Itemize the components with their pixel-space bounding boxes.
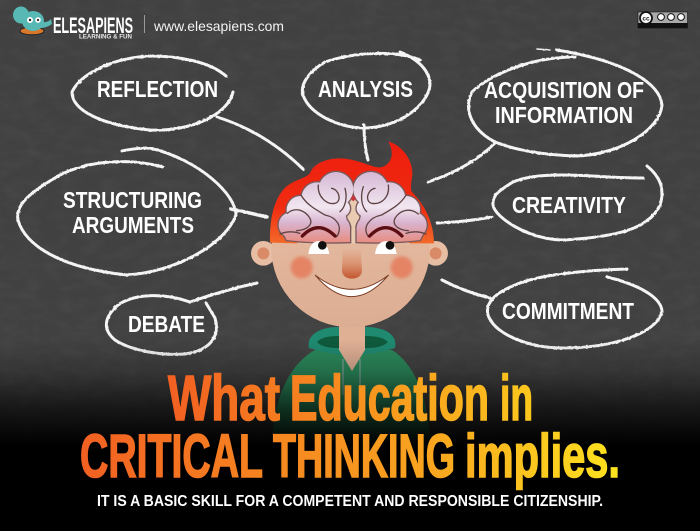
bubble: reflection bbox=[72, 56, 303, 169]
hoodie body bbox=[272, 350, 430, 440]
bubble: acquisition of information bbox=[428, 49, 662, 182]
bubble: creativity bbox=[437, 166, 662, 240]
ears bbox=[251, 241, 448, 266]
logo wordmark: ELESAPIENS bbox=[53, 13, 133, 38]
head bbox=[271, 169, 430, 327]
brain outline bbox=[279, 172, 427, 242]
brain bbox=[279, 172, 427, 242]
bubble labels bbox=[63, 76, 644, 337]
icon: Creative Commons badge bbox=[638, 12, 688, 28]
label: analysis: ANALYSIS bbox=[318, 76, 413, 102]
label: creativity: CREATIVITY bbox=[512, 192, 626, 218]
label: commitment: COMMITMENT bbox=[502, 298, 635, 324]
title line 2: implies. bbox=[465, 422, 620, 490]
title line 2: THINKING bbox=[273, 422, 455, 490]
subtitle: IT IS A BASIC SKILL FOR A COMPETENT AND RESPONSIBLE CITIZENSHIP. bbox=[97, 493, 603, 510]
icon: Creative Commons badge: cc bbox=[642, 16, 650, 22]
hoodie strings bbox=[343, 359, 360, 395]
chalk bubbles bbox=[18, 49, 662, 354]
logo tagline: LEARNING & FUN bbox=[79, 34, 132, 40]
title line 1: What bbox=[168, 362, 280, 434]
neck bbox=[339, 320, 365, 371]
eyes bbox=[308, 241, 329, 254]
hood inner bbox=[317, 336, 388, 348]
hair bbox=[270, 142, 434, 243]
bubble: debate bbox=[106, 283, 257, 354]
title line 1 bbox=[168, 362, 533, 434]
label: arguments: ARGUMENTS bbox=[72, 212, 194, 238]
website address: www.elesapiens.com bbox=[153, 18, 284, 34]
icon: elephant mascot bbox=[13, 6, 52, 35]
nose bbox=[342, 248, 362, 279]
label: reflection: REFLECTION bbox=[97, 76, 218, 102]
forehead gap bbox=[345, 195, 362, 243]
label: debate: DEBATE bbox=[128, 311, 205, 337]
brain fill bbox=[279, 172, 427, 242]
title line 2: CRITICAL bbox=[80, 422, 263, 490]
smile bbox=[315, 275, 389, 297]
bottom fade to black bbox=[0, 340, 700, 445]
logo: Elesapiens bbox=[13, 6, 284, 40]
hoodie hood bbox=[309, 327, 395, 355]
label: structuring: STRUCTURING bbox=[63, 187, 202, 213]
bubble: analysis bbox=[302, 52, 430, 160]
character: student with visible brain bbox=[251, 142, 448, 440]
title line 2 bbox=[80, 422, 620, 490]
brain folds bbox=[280, 185, 426, 237]
bubble: structuring arguments bbox=[18, 148, 267, 275]
cheeks bbox=[291, 256, 313, 278]
eyebrows bbox=[302, 228, 335, 236]
label: acquisition of: ACQUISITION OF bbox=[484, 77, 644, 103]
title line 1: in bbox=[500, 362, 533, 434]
bubble: commitment bbox=[442, 269, 662, 348]
label: information: INFORMATION bbox=[495, 102, 633, 128]
title line 1: Education bbox=[290, 362, 489, 434]
